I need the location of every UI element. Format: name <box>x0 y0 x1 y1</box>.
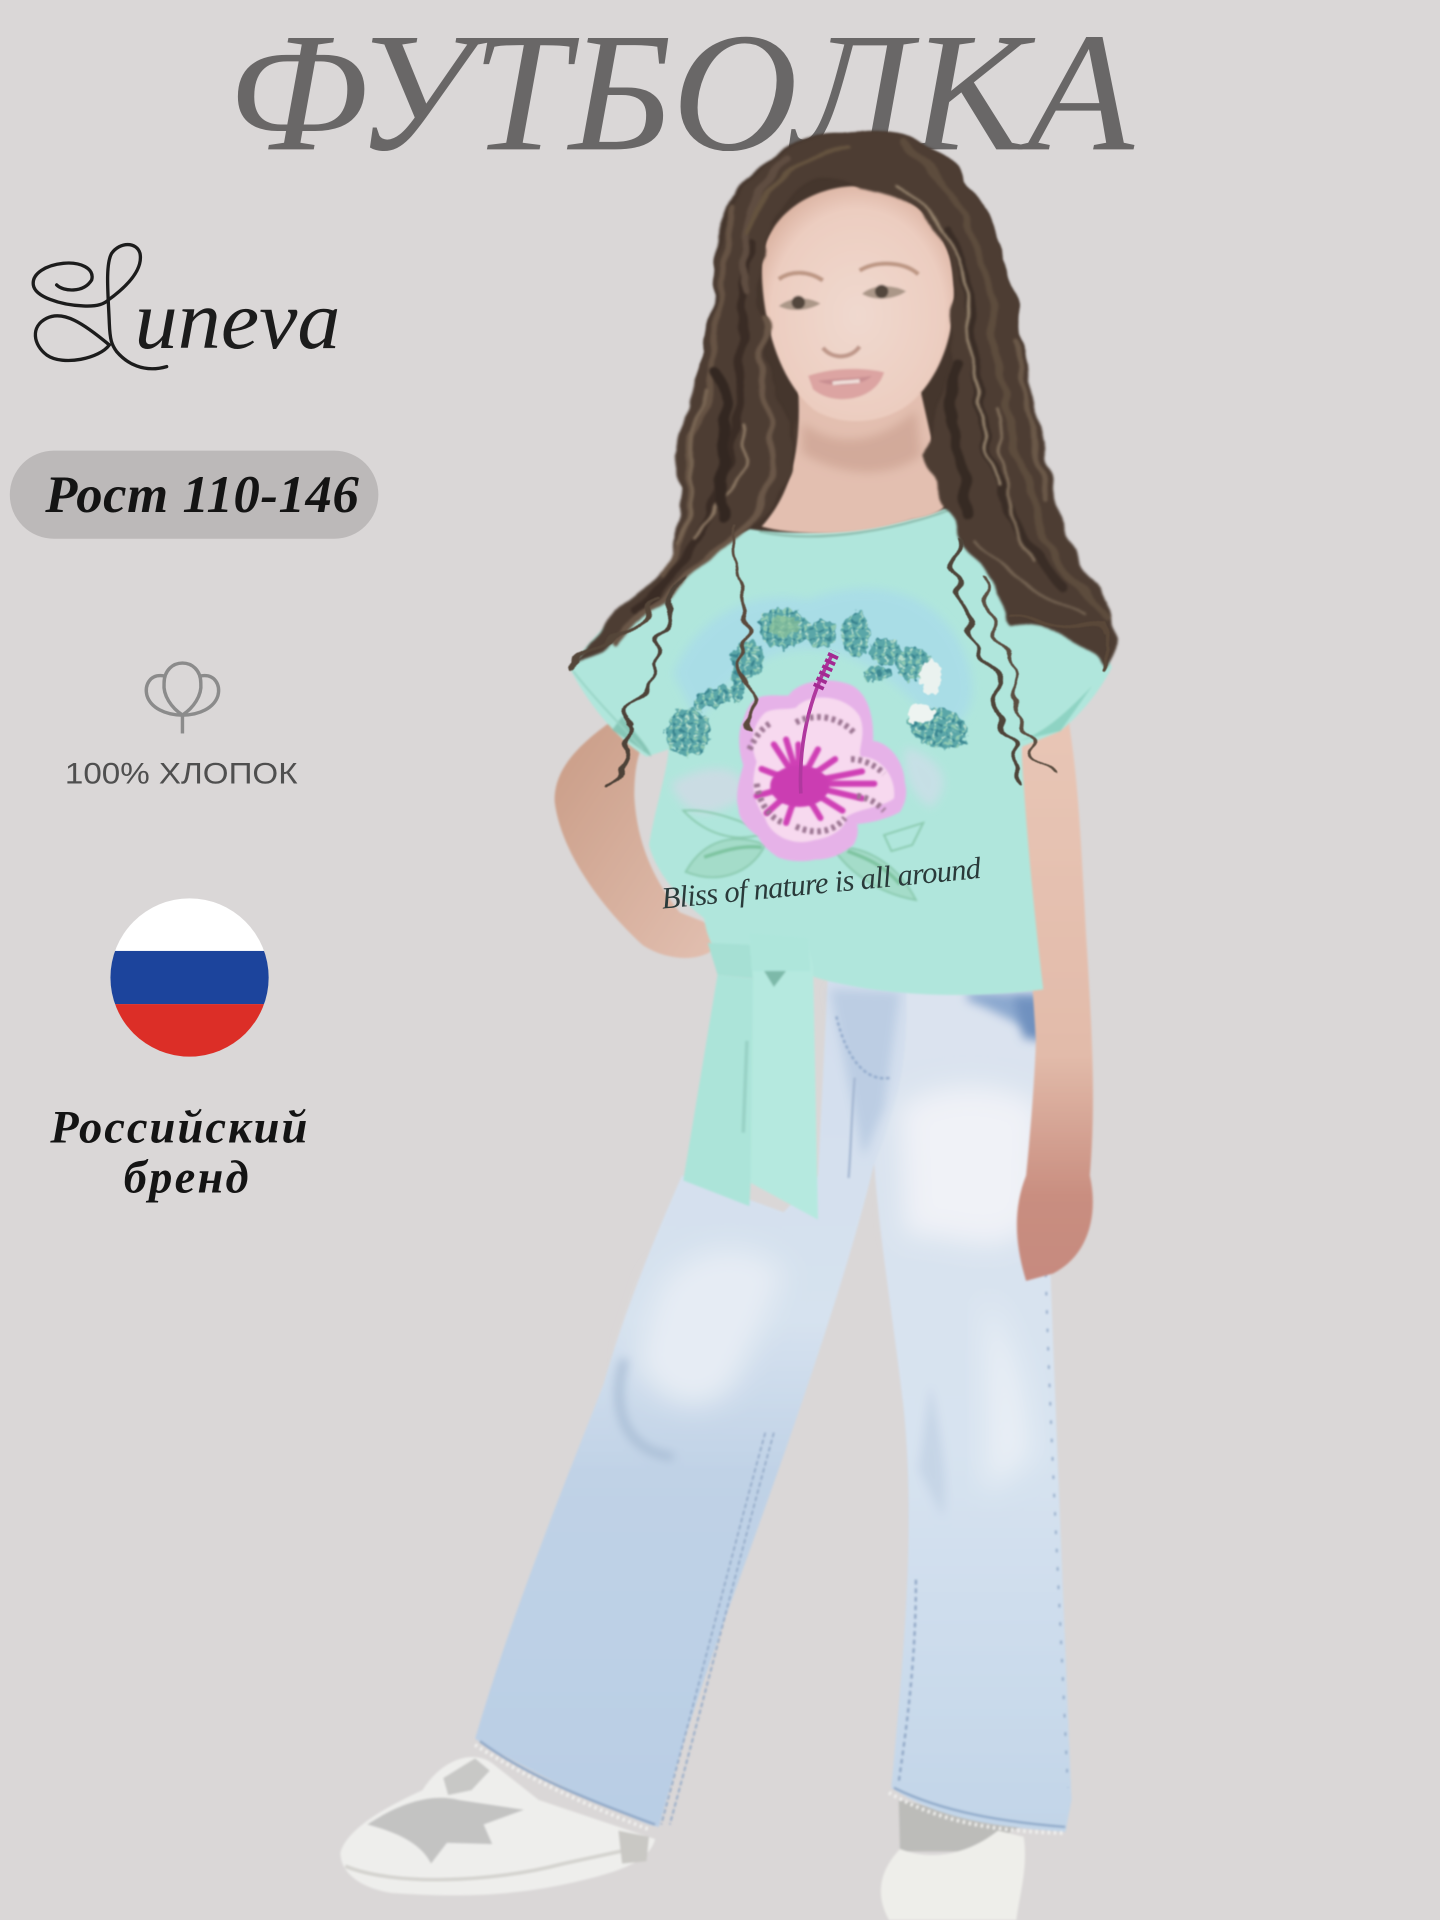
front hair <box>566 129 1113 673</box>
logo: Luneva <box>33 245 340 369</box>
t-shirt print: slogan: Bliss of nature is all around <box>660 851 983 916</box>
loose hair strands over t-shirt <box>569 527 1111 784</box>
tie knot <box>683 933 818 1220</box>
right shoe <box>881 1800 1025 1920</box>
left shoe <box>340 1757 655 1895</box>
title: ФУТБОЛКА <box>228 0 1135 186</box>
brand caption: бренд <box>124 1153 249 1204</box>
size pill: Рост 110-146 <box>44 466 359 524</box>
icon: cotton boll <box>146 663 219 733</box>
t-shirt print: leaves <box>683 810 923 900</box>
left arm <box>555 722 713 958</box>
cotton label: 100% ХЛОПОК <box>65 758 298 791</box>
jeans <box>475 980 1071 1833</box>
t-shirt print: hibiscus flower <box>737 651 906 861</box>
back hair mass <box>680 130 1063 588</box>
icon: Russian flag <box>108 894 272 1060</box>
brand caption: Российский <box>49 1102 307 1153</box>
t-shirt print: blue wash <box>671 589 972 813</box>
face <box>762 186 954 421</box>
neck <box>762 392 947 533</box>
t-shirt print: sequin arc <box>666 609 973 757</box>
logo: Luneva: uneva <box>135 275 340 367</box>
photo: girl in t-shirt and jeans <box>340 129 1113 1920</box>
logo flourish <box>33 245 167 369</box>
t-shirt <box>569 504 1112 995</box>
brand caption <box>49 1102 307 1204</box>
right arm <box>1016 716 1093 1281</box>
size pill <box>10 451 378 539</box>
